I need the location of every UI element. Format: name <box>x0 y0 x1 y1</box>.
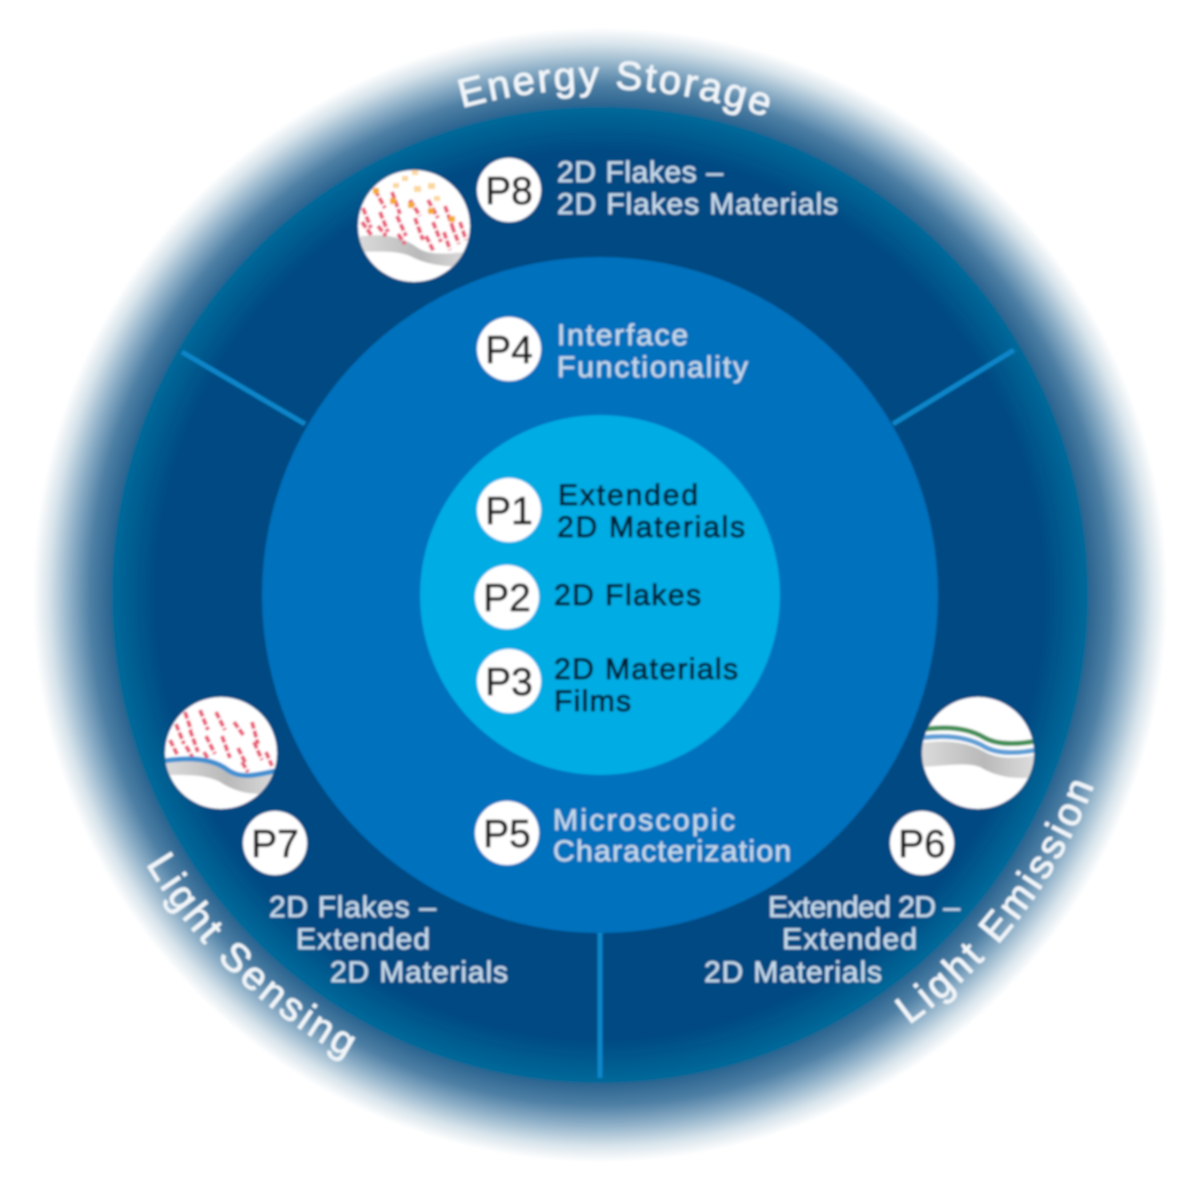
badge P5 <box>475 801 539 865</box>
heading: Energy Storage: Energy Storage <box>456 60 772 118</box>
ring divider: left <box>182 352 305 424</box>
badge P8: P8 <box>485 170 533 213</box>
badge P2 <box>475 565 539 629</box>
ring divider: bottom <box>598 930 602 1078</box>
label: P3: Films <box>554 685 631 718</box>
label: P1: 2D Materials <box>557 511 745 544</box>
label: P8: 2D Flakes – <box>557 156 723 189</box>
badge P6 <box>890 811 954 875</box>
label: P6: Extended <box>782 923 917 956</box>
label: P8: 2D Flakes Materials <box>557 188 838 221</box>
central disc <box>420 415 780 775</box>
label: P5: Characterization <box>553 835 791 868</box>
label: P5 <box>553 804 791 868</box>
label: P4: Interface <box>557 319 688 352</box>
label: P1 <box>557 479 745 544</box>
ring divider: right <box>893 350 1014 424</box>
middle ring <box>262 257 938 933</box>
badge P5: P5 <box>483 813 531 856</box>
illustration: P8 flakes on flakes <box>356 170 472 282</box>
badge P3: P3 <box>485 661 533 704</box>
label: P6: Extended 2D – <box>768 891 960 924</box>
badge P7: P7 <box>251 823 299 866</box>
label: P2: 2D Flakes <box>554 579 701 612</box>
label: P7: 2D Materials <box>330 956 508 989</box>
label: P5: Microscopic <box>553 804 735 837</box>
label: P7: 2D Flakes – <box>269 891 436 924</box>
illustration: P7 flakes on extended <box>163 697 280 809</box>
label: P7: Extended <box>296 923 430 956</box>
badge P3 <box>477 649 541 713</box>
heading: Light Sensing: Light Sensing <box>146 850 357 1062</box>
badge P6: P6 <box>898 823 946 866</box>
badge P7 <box>243 811 307 875</box>
label: P8 <box>557 156 838 221</box>
heading: Light Emission: Light Emission <box>893 779 1095 1025</box>
label: P3: 2D Materials <box>554 653 738 686</box>
label: P6 <box>704 891 960 989</box>
badge P4 <box>477 317 541 381</box>
badge P4: P4 <box>485 329 533 372</box>
illustration: P6 extended on extended <box>920 697 1036 809</box>
badge P1: P1 <box>485 490 533 533</box>
badge P1 <box>477 478 541 542</box>
badge P2: P2 <box>483 577 531 620</box>
label: P3 <box>554 653 738 718</box>
badge P8 <box>477 158 541 222</box>
label: P4: Functionality <box>557 351 748 384</box>
label: P1: Extended <box>558 479 698 512</box>
outer application ring <box>112 107 1088 1083</box>
label: P4 <box>557 319 748 384</box>
label: P6: 2D Materials <box>704 956 882 989</box>
label: P7 <box>269 891 508 989</box>
